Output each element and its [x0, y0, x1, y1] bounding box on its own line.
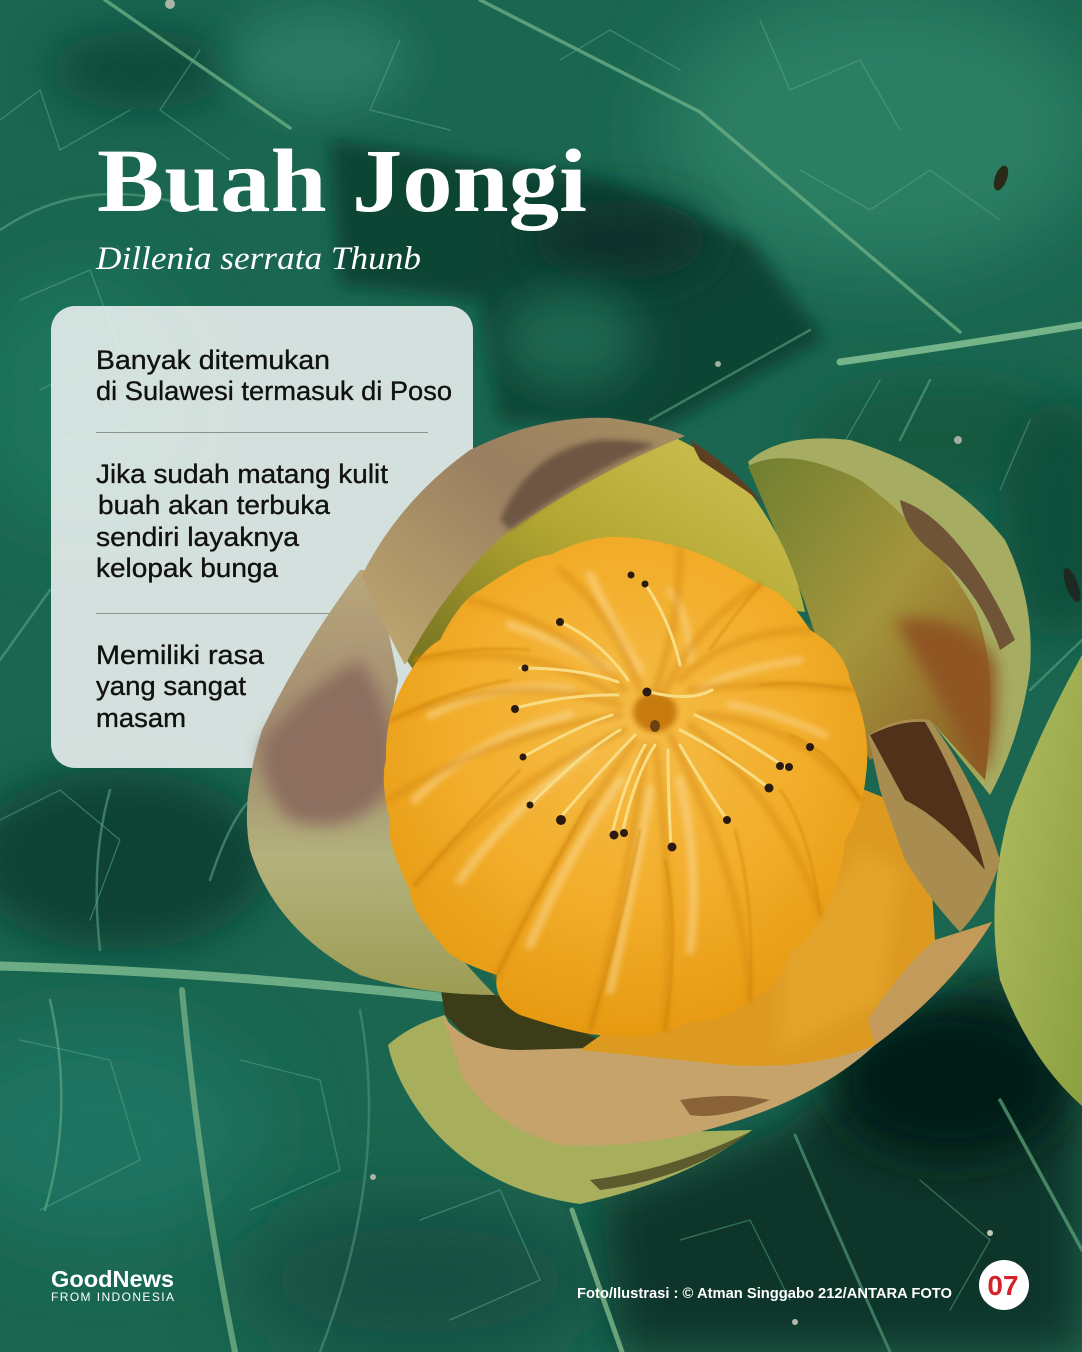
- text block: ripening: [96, 459, 389, 583]
- fruit illustration: [247, 418, 1082, 1204]
- page number badge: 07: [987, 1270, 1019, 1301]
- title: Buah Jongi: [97, 132, 587, 231]
- logo: GoodNews from Indonesia: FROM INDONESIA: [51, 1290, 174, 1304]
- subtitle: Dillenia serrata Thunb: [95, 241, 421, 277]
- stamens: [516, 584, 785, 846]
- text block: taste: Memiliki rasa: [96, 640, 265, 670]
- segment ridges (sharp): [392, 585, 860, 1030]
- photo credit: Foto/Ilustrasi : © Atman Singgabo 212/ANTARA FOTO: [577, 1285, 952, 1302]
- logo: GoodNews from Indonesia: GoodNews: [51, 1266, 174, 1292]
- frosted text card: [51, 306, 473, 768]
- dark gap under flesh: [440, 985, 640, 1060]
- text block: ripening: sendiri layaknya: [96, 522, 300, 552]
- dividers: [96, 432, 428, 614]
- segment ridges (soft): [388, 550, 860, 1030]
- left petal skin: [247, 570, 495, 995]
- top petal interior: [380, 420, 805, 680]
- text block: habitat: [96, 345, 452, 406]
- centre of flesh: [633, 692, 677, 732]
- top petal skin: [362, 418, 685, 665]
- text block: taste: [96, 640, 265, 733]
- text block: ripening: Jika sudah matang kulit: [96, 459, 389, 489]
- anthers: [511, 572, 814, 852]
- text block: ripening: kelopak bunga: [96, 553, 279, 583]
- right petal: [748, 438, 1031, 795]
- text block: habitat: di Sulawesi termasuk di Poso: [96, 376, 452, 406]
- text block: taste: masam: [96, 703, 186, 733]
- text block: taste: yang sangat: [96, 671, 246, 701]
- page number badge: [979, 1260, 1029, 1310]
- brown flap: [868, 719, 1000, 932]
- orange flesh: [384, 537, 867, 1037]
- neighbouring fruit: [994, 655, 1082, 1106]
- logo: GoodNews from Indonesia: [51, 1266, 174, 1304]
- lower green petal: [388, 1015, 752, 1204]
- flesh highlights: [415, 575, 825, 990]
- inner orange petal: [580, 780, 992, 1066]
- text block: ripening: buah akan terbuka: [98, 490, 331, 520]
- lower tan petal: [442, 1015, 880, 1146]
- text block: habitat: Banyak ditemukan: [96, 345, 330, 375]
